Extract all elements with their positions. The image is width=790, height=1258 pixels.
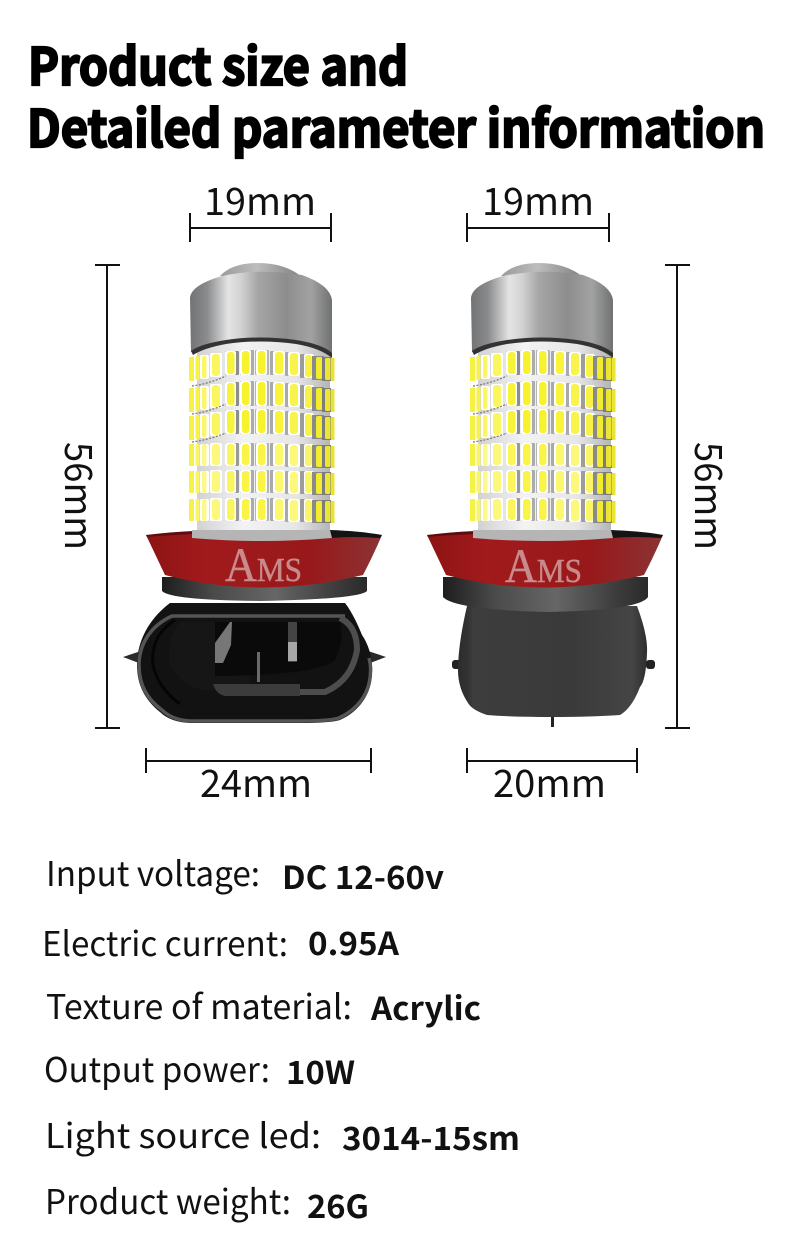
spec: product weight: Product weight: [45,1175,291,1224]
spec: light source led: Light source led: [45,1109,321,1158]
spec: texture of material [46,980,481,1030]
dimension: top right 19mm [467,171,609,242]
dimension: right height 56mm: 56mm [684,442,739,550]
spec: product weight: 26G [307,1182,369,1228]
title: Product size and [28,26,408,100]
dimension: bottom left 24mm: 24mm [200,753,312,808]
bulb head, LEDs and red flange [427,263,663,588]
spec: texture of material: Texture of material: [46,980,352,1029]
bulb: front view with connector [123,263,386,723]
spec: input voltage: Input voltage: [46,847,260,896]
spec: electric current: Electric current: [42,917,288,966]
spec: input voltage [46,847,444,899]
dimension: bottom right 20mm: 20mm [493,753,606,808]
spec: light source led [45,1109,520,1160]
dimension: left height 56mm [54,265,120,728]
pins [215,622,232,663]
spec: output power: 10W [286,1048,355,1094]
dimension: top left 19mm: 19mm [204,171,316,226]
title [27,26,765,162]
spec: input voltage: DC 12-60v [282,853,444,899]
dimension: left height 56mm: 56mm [54,442,109,550]
brand label: AMS [225,539,302,592]
dimension: top left 19mm [190,171,331,242]
bulb head, LEDs and red flange [146,263,382,588]
connector housing front [123,603,386,723]
dimension: right height 56mm [665,265,739,728]
brand label: AMS [505,540,582,593]
retaining ring [162,577,367,601]
retaining ring [443,577,648,612]
dimension: bottom right 20mm [467,748,637,808]
connector housing side [452,606,655,727]
bulb: side view [427,263,663,727]
dimension: bottom left 24mm [146,748,371,808]
spec: output power: Output power: [44,1043,270,1092]
spec: electric current: 0.95A [308,919,399,965]
spec: texture of material: Acrylic [370,984,481,1030]
spec: light source led: 3014-15sm [342,1114,520,1160]
dimension: top right 19mm: 19mm [482,171,594,226]
